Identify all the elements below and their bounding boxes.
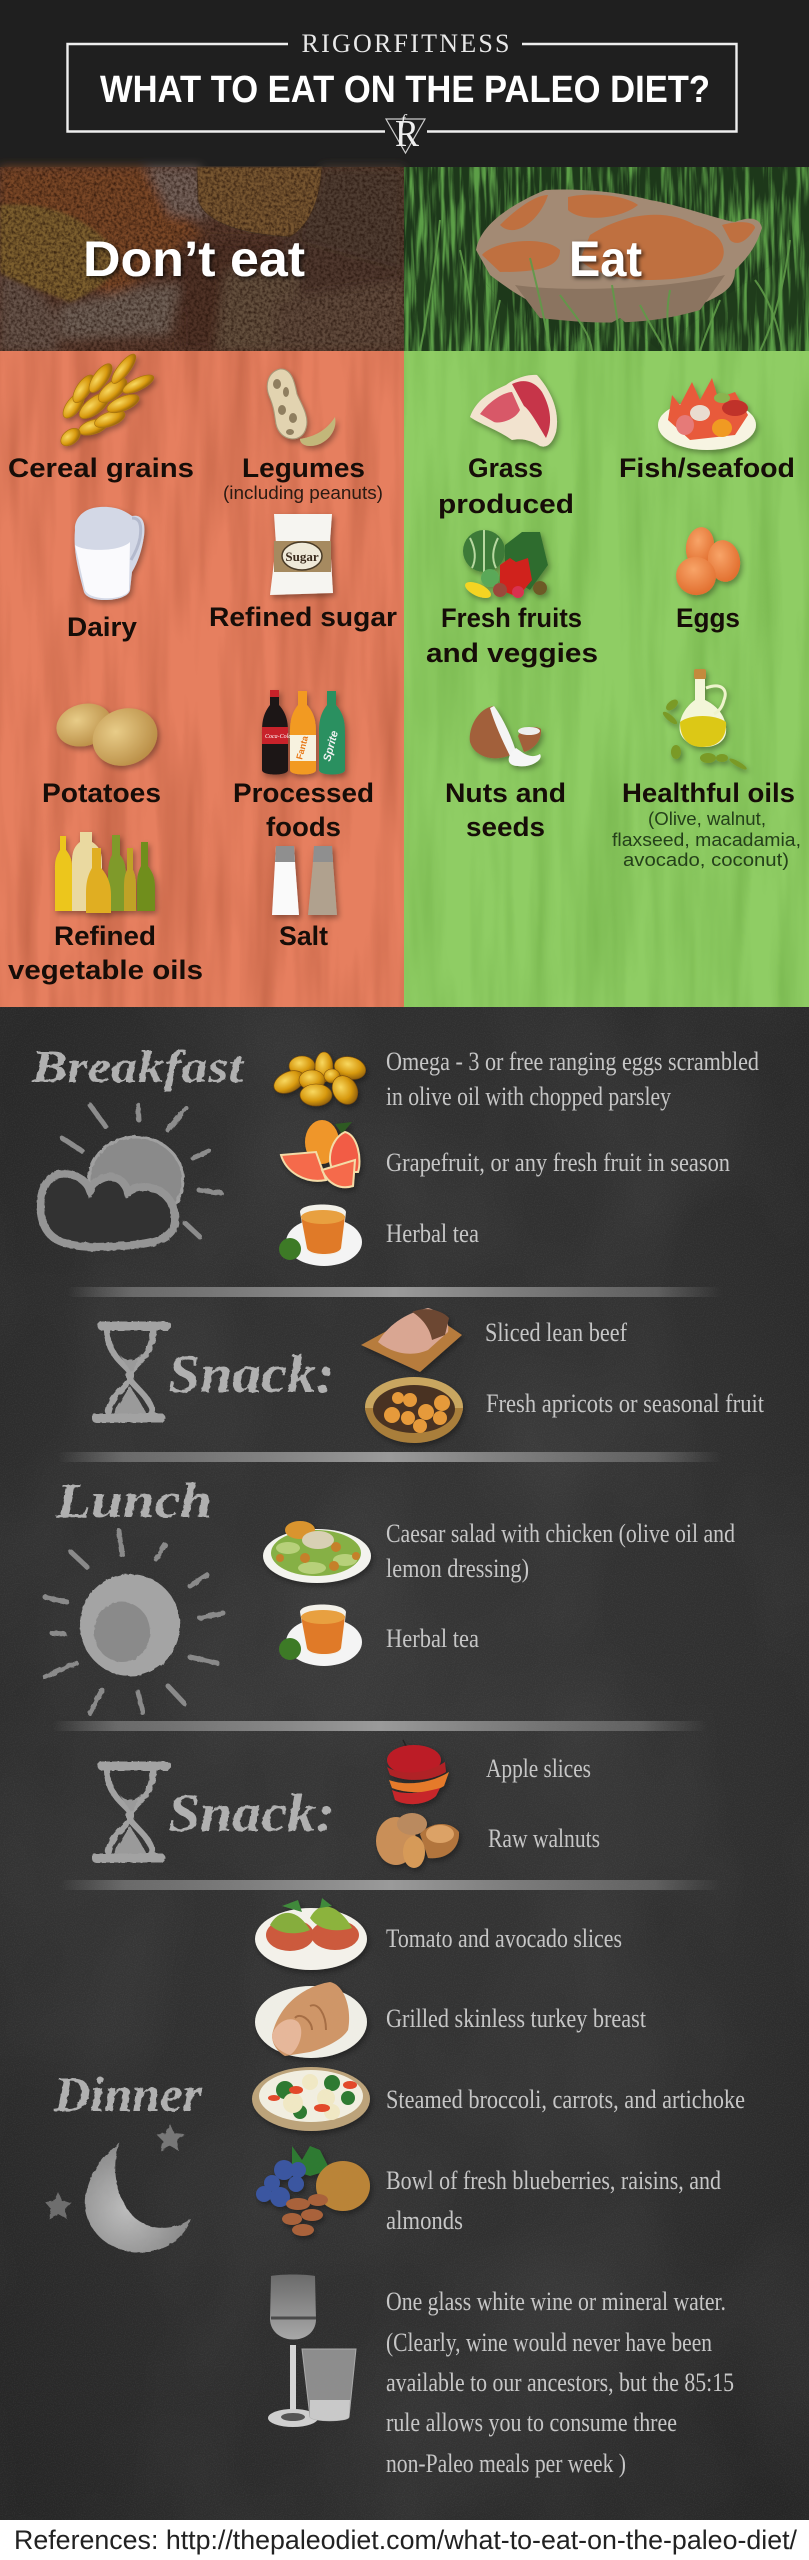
label: nuts and seeds: Nuts and	[445, 778, 566, 808]
heading: breakfast: Breakfast	[31, 1041, 244, 1092]
icon: coconut	[470, 706, 541, 766]
label: healthful oils: Healthful oils	[622, 778, 795, 808]
panel: eat list	[404, 351, 809, 1007]
label: dairy: Dairy	[67, 612, 137, 642]
heading: snack: Snack:	[168, 1783, 335, 1843]
meal item: wine note: rule allows you to consume three	[386, 2408, 677, 2437]
icon: crescent moon and stars	[45, 2124, 191, 2252]
meal item: apple slices: Apple slices	[486, 1754, 591, 1783]
meal item: herbal tea: Herbal tea	[386, 1624, 479, 1653]
meal item: omega eggs: in olive oil with chopped parsley	[386, 1082, 671, 1111]
icon: vegetable oil bottles	[55, 832, 155, 913]
icon: steamed vegetables	[252, 2067, 370, 2131]
icon: soda bottles: Coca-Cola	[265, 734, 291, 740]
heading: don't eat: Don’t eat	[83, 231, 305, 287]
heading: eat: Eat	[569, 231, 642, 287]
meal item: wine note: non-Paleo meals per week )	[386, 2449, 626, 2478]
icon: seafood plate	[658, 378, 756, 450]
panel: don't eat list	[0, 340, 404, 1007]
meal item: steamed vegetables: Steamed broccoli, carrots, and artichoke	[386, 2085, 745, 2114]
icon: eggs	[672, 525, 743, 600]
icon: sliced beef	[361, 1308, 462, 1372]
meal item: wine note	[386, 2287, 734, 2478]
panel: eat photo	[404, 167, 809, 351]
meal item: wine note: One glass white wine or mineral water.	[386, 2287, 726, 2316]
icon: milk jug	[75, 507, 144, 600]
icon: hourglass	[96, 1326, 167, 1418]
icon: caesar salad	[263, 1521, 371, 1583]
meal item: omega eggs	[386, 1047, 759, 1111]
icon: olive oil	[661, 669, 748, 771]
meal item: turkey: Grilled skinless turkey breast	[386, 2004, 647, 2033]
icon: soda bottles: Sprite	[321, 730, 341, 763]
label: cereal grains: Cereal grains	[8, 453, 194, 483]
icon: sugar bag: Sugar	[285, 549, 319, 564]
icon: walnuts	[376, 1813, 459, 1868]
icon: berries and nuts	[256, 2146, 370, 2236]
label: fish/seafood: Fish/seafood	[619, 453, 795, 483]
meal item: herbal tea: Herbal tea	[386, 1219, 479, 1248]
label: refined vegetable oils	[8, 921, 203, 985]
icon: omega-3 capsules	[270, 1052, 368, 1109]
icon: potatoes	[52, 697, 166, 775]
icon: wine and water glasses	[268, 2274, 356, 2427]
meal item: apricots: Fresh apricots or seasonal fruit	[486, 1389, 765, 1418]
panel: chalkboard menu	[0, 1007, 809, 2520]
icon: grass-fed meat	[470, 375, 557, 447]
icon: sun behind cloud	[40, 1105, 221, 1247]
icon: apple slices	[387, 1740, 449, 1804]
meal item: bowl of berries: Bowl of fresh blueberries, raisins, and	[386, 2166, 721, 2195]
icon: herbal tea	[279, 1204, 362, 1266]
note: oil types: (Olive, walnut,	[648, 809, 766, 829]
icon: hourglass	[96, 1766, 167, 1858]
icon: soda bottles	[262, 690, 345, 774]
logo: R	[395, 113, 420, 155]
note: oil types: flaxseed, macadamia,	[612, 830, 801, 850]
label: fresh fruits and veggies	[426, 603, 598, 668]
brand name: RIGORFITNESS	[302, 29, 510, 58]
heading: lunch: Lunch	[55, 1472, 212, 1528]
label: grass produced: produced	[438, 489, 574, 519]
icon: peanut	[267, 369, 335, 446]
meal item: sliced beef: Sliced lean beef	[485, 1318, 627, 1347]
label: salt: Salt	[279, 921, 328, 951]
icon: avocado toast plate	[255, 1898, 367, 1970]
meal item: tomato and avocado: Tomato and avocado slices	[386, 1924, 622, 1953]
note: oil types: avocado, coconut)	[623, 850, 789, 870]
label: processed foods	[233, 778, 374, 842]
heading: dinner: Dinner	[53, 2066, 203, 2122]
icon: wheat	[36, 340, 166, 461]
meal item: grapefruit: Grapefruit, or any fresh fruit in season	[386, 1148, 730, 1177]
icon: grapefruit	[281, 1120, 359, 1187]
label: grass produced: Grass	[468, 453, 543, 483]
header band	[0, 0, 809, 167]
meal item: caesar salad	[386, 1519, 735, 1583]
icon: herbal tea	[279, 1604, 362, 1666]
icon: fruits and vegetables	[463, 530, 548, 601]
logo	[386, 112, 425, 155]
meal item: raw walnuts: Raw walnuts	[488, 1824, 600, 1853]
label: fresh fruits and veggies: and veggies	[426, 638, 598, 668]
icon: soda bottles: Fanta	[294, 734, 310, 761]
label: fresh fruits and veggies: Fresh fruits	[441, 603, 582, 633]
footer: references: References: http://thepaleodiet.com/what-to-eat-on-the-paleo-diet/	[14, 2525, 797, 2555]
meal item: wine note: available to our ancestors, but the 85:15	[386, 2368, 734, 2397]
meal item: caesar salad: lemon dressing)	[386, 1554, 529, 1583]
label: legumes: Legumes	[242, 453, 365, 483]
meal item: bowl of berries: almonds	[386, 2206, 463, 2235]
label: grass produced	[438, 453, 574, 519]
label: refined vegetable oils: Refined	[54, 921, 156, 951]
note: including peanuts: (including peanuts)	[223, 483, 383, 503]
note: oil types	[612, 809, 801, 870]
icon: apricot bowl	[365, 1377, 463, 1443]
meal item: caesar salad: Caesar salad with chicken (olive oil and	[386, 1519, 735, 1548]
title: WHAT TO EAT ON THE PALEO DIET?	[100, 69, 710, 111]
logo: f	[401, 112, 408, 129]
meal item: wine note: (Clearly, wine would never have been	[386, 2328, 712, 2357]
label: nuts and seeds: seeds	[466, 812, 545, 842]
label: potatoes: Potatoes	[42, 778, 161, 808]
panel: don't eat photo	[0, 167, 404, 351]
meat	[476, 189, 762, 323]
heading: snack: Snack:	[168, 1344, 335, 1404]
icon: full sun	[45, 1531, 223, 1713]
label: eggs: Eggs	[676, 603, 740, 633]
icon: salt and pepper	[272, 846, 337, 915]
label: refined vegetable oils: vegetable oils	[8, 955, 203, 985]
label: nuts and seeds	[445, 778, 566, 842]
label: refined sugar: Refined sugar	[209, 602, 398, 632]
icon: turkey plate	[255, 1982, 367, 2058]
meal item: bowl of berries	[386, 2166, 721, 2235]
icon: sugar bag	[270, 514, 333, 595]
title frame	[68, 44, 736, 132]
label: processed foods: foods	[266, 812, 341, 842]
label: processed foods: Processed	[233, 778, 374, 808]
